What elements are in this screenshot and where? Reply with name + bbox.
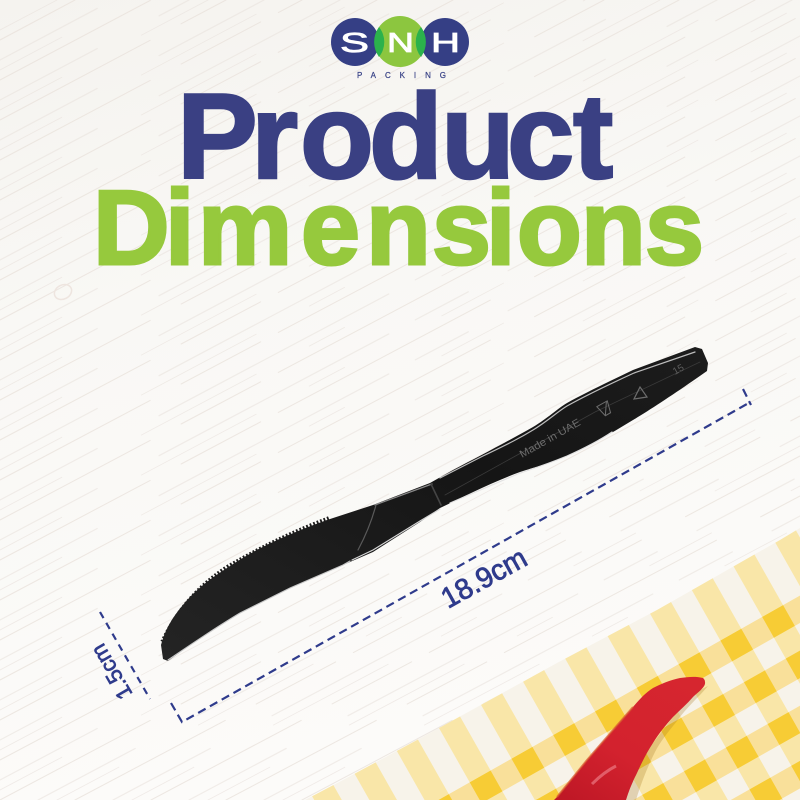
knife body (161, 347, 708, 661)
knife edge highlights (168, 352, 700, 660)
logo letters: S (340, 27, 369, 58)
logo letters: H (431, 27, 460, 58)
length label: 18.9cm (436, 542, 533, 615)
icon: food safe glass imprint (597, 401, 613, 417)
knife imprint: Made in UAE: Made in UAE (518, 417, 583, 461)
icon: recycle triangle imprint (634, 387, 647, 399)
red chili pepper (554, 677, 708, 800)
gingham napkin (305, 528, 800, 800)
title: Dimensions: Dimensions (93, 169, 704, 287)
logo tagline: PACKING (357, 71, 446, 80)
width dimension line (100, 612, 150, 699)
logo: SNH Packing (331, 16, 469, 80)
logo letters: N (387, 27, 414, 58)
title: Product: Product (177, 68, 613, 204)
plastic knife (161, 347, 708, 661)
knife imprint: 15: 15 (671, 362, 687, 378)
length dimension line (171, 389, 751, 722)
width label: 1.5cm (86, 640, 137, 704)
logo circles (331, 16, 469, 67)
logo letters (340, 27, 460, 58)
knife serrated edge (163, 519, 329, 642)
